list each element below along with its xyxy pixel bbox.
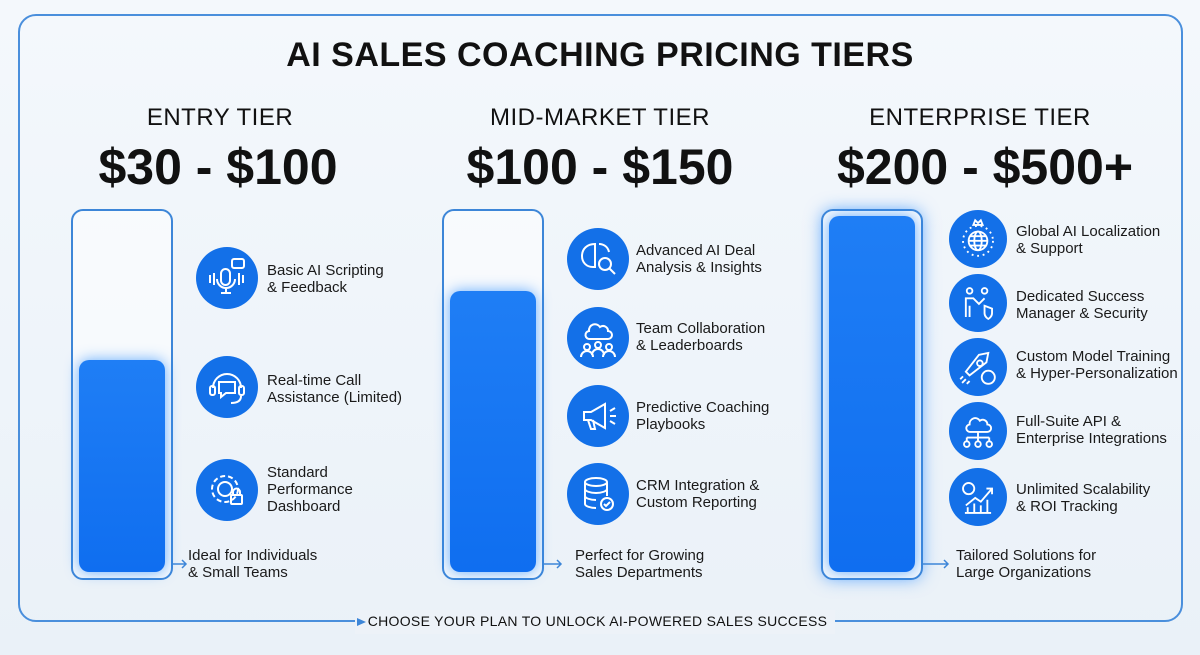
text: mid feature 3: Predictive Coaching [636, 399, 769, 416]
text: mid feature 3: Playbooks [636, 416, 705, 433]
bottom call to action [355, 610, 835, 634]
text: mid feature 2 [636, 320, 765, 354]
arrow + footer: entry [173, 547, 317, 581]
text: mid feature 4 [636, 477, 760, 511]
icon: mic robot [196, 247, 258, 309]
tier name: entry: ENTRY TIER [147, 104, 293, 131]
icon: brain [567, 228, 629, 290]
arrow + footer: mid: Perfect for Growing [575, 547, 704, 564]
arrow + footer: entry: & Small Teams [188, 564, 288, 581]
arrow + footer: enterprise: Large Organizations [956, 564, 1091, 581]
icon: database [567, 463, 629, 525]
icon: gear lock [196, 459, 258, 521]
text: ent feature 1: & Support [1016, 240, 1083, 257]
text: ent feature 1 [1016, 223, 1160, 257]
text: feature 1: & Feedback [267, 279, 347, 296]
text: ent feature 2: Manager & Security [1016, 305, 1148, 322]
text: ent feature 3: Custom Model Training [1016, 348, 1170, 365]
title: AI SALES COACHING PRICING TIERS [286, 36, 914, 74]
text: ent feature 4: Full-Suite API & [1016, 413, 1121, 430]
bar: entry [71, 209, 173, 580]
price: mid: $100 - $150 [467, 139, 733, 195]
text: ent feature 2: Dedicated Success [1016, 288, 1144, 305]
bar: mid [442, 209, 544, 580]
text: ent feature 4: Enterprise Integrations [1016, 430, 1167, 447]
text: mid feature 4: Custom Reporting [636, 494, 757, 511]
tier name: enterprise: ENTERPRISE TIER [869, 104, 1091, 131]
text: ent feature 3 [1016, 348, 1178, 382]
text: ent feature 5: Unlimited Scalability [1016, 481, 1150, 498]
icon: growth chart [949, 468, 1007, 526]
icon: megaphone [567, 385, 629, 447]
arrow + footer: mid: Sales Departments [575, 564, 703, 581]
text: feature 2: Assistance (Limited) [267, 389, 402, 406]
text: mid feature 2: & Leaderboards [636, 337, 743, 354]
text: mid feature 1: Advanced AI Deal [636, 242, 755, 259]
text: mid feature 4: CRM Integration & [636, 477, 759, 494]
icon: globe [949, 210, 1007, 268]
icon: team cloud [567, 307, 629, 369]
text: feature 1: Basic AI Scripting [267, 262, 384, 279]
text: ent feature 4 [1016, 413, 1167, 447]
text: ent feature 5 [1016, 481, 1150, 515]
text: mid feature 3 [636, 399, 769, 433]
text: feature 2: Real-time Call [267, 372, 361, 389]
icon: headset [196, 356, 258, 418]
text: ent feature 2 [1016, 288, 1148, 322]
bar: enterprise [821, 209, 923, 580]
text: mid feature 1 [636, 242, 762, 276]
price: enterprise: $200 - $500+ [837, 139, 1133, 195]
icon: handshake [949, 274, 1007, 332]
text: feature 1 [267, 262, 384, 296]
arrow + footer: entry: Ideal for Individuals [188, 547, 317, 564]
text: feature 3: Dashboard [267, 498, 340, 515]
text: feature 3 [267, 464, 353, 515]
text: ent feature 5: & ROI Tracking [1016, 498, 1118, 515]
text: mid feature 2: Team Collaboration [636, 320, 765, 337]
arrow + footer: enterprise [923, 547, 1096, 581]
text: feature 3: Performance [267, 481, 353, 498]
text: ent feature 3: & Hyper-Personalization [1016, 365, 1178, 382]
arrow + footer: enterprise: Tailored Solutions for [956, 547, 1096, 564]
text: ent feature 1: Global AI Localization [1016, 223, 1160, 240]
arrow + footer: mid [544, 547, 704, 581]
tier name: mid: MID-MARKET TIER [490, 104, 710, 131]
text: mid feature 1: Analysis & Insights [636, 259, 762, 276]
icon: cloud API [949, 402, 1007, 460]
text: feature 3: Standard [267, 464, 328, 481]
price: entry: $30 - $100 [98, 139, 338, 195]
icon: rocket [949, 338, 1007, 396]
bottom call to action: CHOOSE YOUR PLAN TO UNLOCK AI-POWERED SALES SUCCESS [368, 613, 827, 629]
text: feature 2 [267, 372, 402, 406]
